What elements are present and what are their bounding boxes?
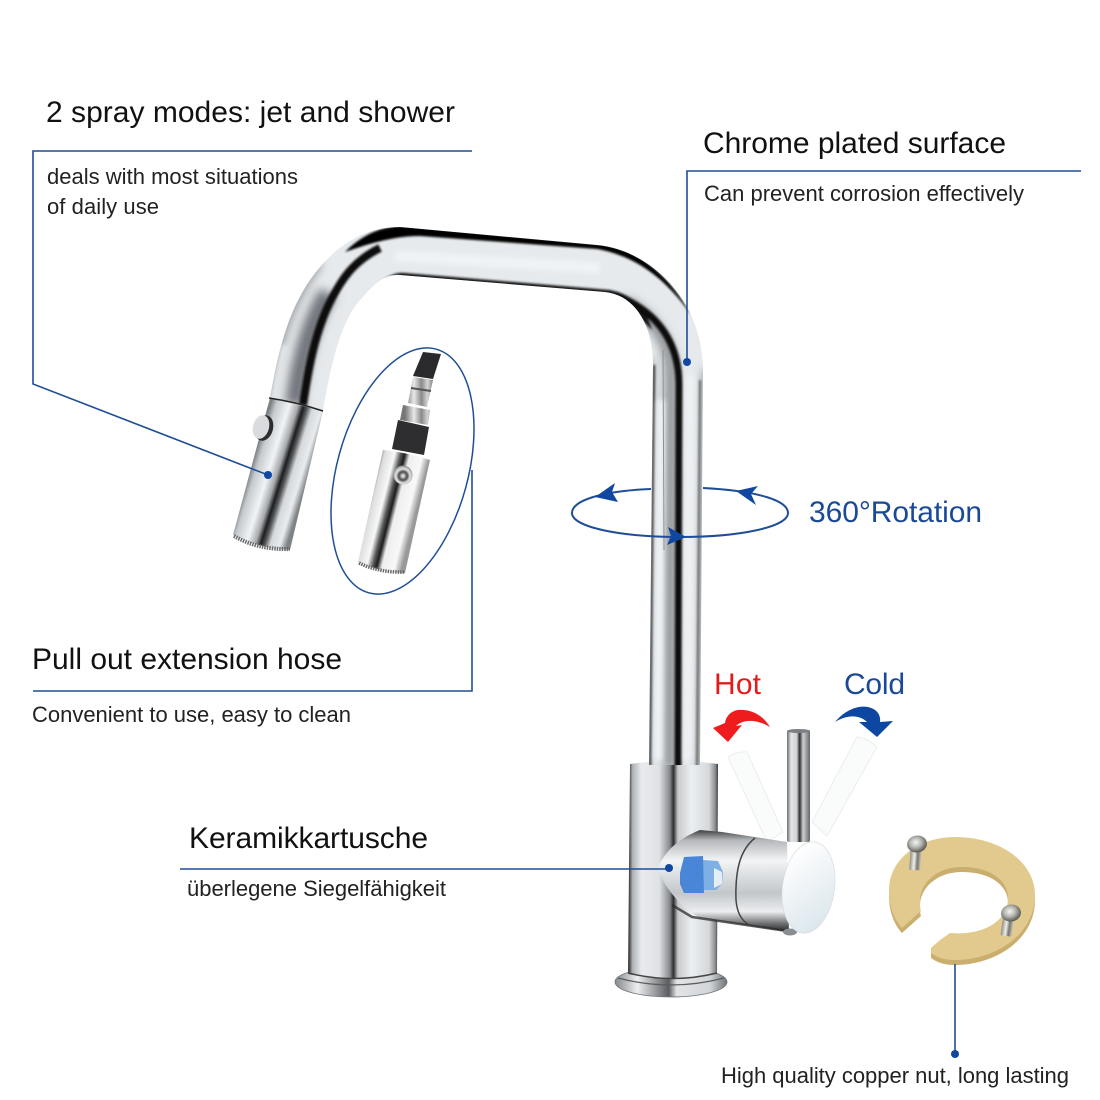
icon: arrow front (667, 527, 686, 545)
text: hose description: Convenient to use, easy to clean (32, 702, 351, 727)
rotation indicator (572, 483, 788, 545)
callout lines: ceramic cartridge (180, 864, 673, 872)
label: 360 rotation: 360°Rotation (809, 496, 982, 529)
faucet spout tube (270, 227, 703, 765)
ghost lever: cold position (812, 737, 877, 836)
callout lines: spray modes (33, 151, 472, 479)
detached spray head with hose (358, 352, 441, 573)
callout lines: copper nut (951, 964, 959, 1058)
heading: ceramic cartridge: Keramikkartusche (189, 822, 428, 855)
highlight ellipse around spray head (306, 332, 499, 610)
icon: arrow right (736, 486, 758, 505)
icon: screw left (906, 834, 928, 870)
text: cartridge description: überlegene Siegelfähigkeit (187, 876, 446, 901)
icon: cold arrow (835, 707, 893, 737)
brass copper nut (889, 834, 1035, 965)
heading: chrome surface: Chrome plated surface (703, 127, 1006, 160)
handle housing (658, 830, 797, 936)
handle lever (787, 729, 810, 842)
label: hot: Hot (714, 668, 762, 701)
label: cold: Cold (844, 668, 905, 701)
text: copper nut description: High quality copper nut, long lasting (721, 1063, 1069, 1088)
icon: ceramic cartridge (680, 856, 723, 893)
text: spray modes description: deals with most situations (47, 164, 298, 189)
callout lines: pull-out hose (33, 470, 472, 691)
icon: arrow left (595, 483, 618, 502)
icon: screw right (1000, 903, 1022, 937)
callout lines: chrome surface (683, 171, 1081, 366)
text: chrome description: Can prevent corrosion effectively (704, 181, 1024, 206)
icon: hot arrow (713, 710, 770, 742)
pull-out spray head (233, 398, 323, 550)
ghost lever: hot position (728, 752, 783, 842)
faucet base cylinder and flange (615, 761, 727, 997)
text: spray modes description: of daily use (47, 194, 159, 219)
heading: pull-out hose: Pull out extension hose (32, 643, 342, 676)
icon: spray mode button (250, 413, 276, 443)
handle end disc (776, 838, 841, 937)
heading: spray modes: 2 spray modes: jet and shower (46, 96, 455, 129)
icon: spray button ball (394, 466, 412, 484)
